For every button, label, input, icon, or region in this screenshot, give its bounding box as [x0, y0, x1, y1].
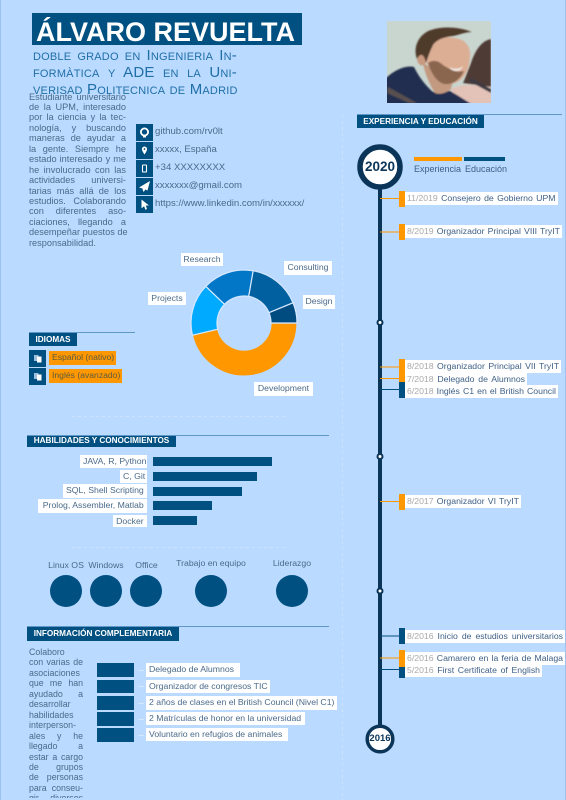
intro paragraph: ciaciones, llegando a	[29, 217, 126, 227]
intro paragraph: actividades universi-	[29, 175, 126, 185]
complementary paragraph: de grupos	[29, 762, 83, 772]
achievement label: Organizador de congresos TIC	[149, 681, 268, 691]
label: Development	[258, 383, 309, 393]
skill label	[120, 470, 147, 483]
bar	[153, 487, 242, 496]
heading: experiencia y educacion: EXPERIENCIA Y EDUCACIÓN	[363, 117, 478, 126]
complementary paragraph: interperson-	[29, 720, 76, 730]
legend	[414, 157, 507, 174]
achievement label: 2 Matrículas de honor en la universidad	[149, 713, 301, 723]
complementary paragraph: llegado a	[29, 741, 83, 751]
intro paragraph: desempeñar puestos de	[29, 227, 128, 237]
label	[181, 253, 223, 266]
skill label: leadership: Liderazgo	[273, 558, 311, 568]
complementary paragraph: de personas	[29, 772, 83, 782]
intro paragraph: maneras de ayudar a	[29, 133, 126, 143]
location text: xxxxx, España	[155, 144, 217, 155]
entry: 8/2018 Organizador Principal VII TryIT	[407, 361, 559, 371]
icon: language	[29, 350, 46, 367]
subtitle: doble grado en Ingenieria In-	[33, 47, 237, 64]
achievement label: Delegado de Alumnos	[149, 664, 234, 674]
circle	[130, 574, 162, 607]
bar	[153, 516, 197, 525]
entry: 5/2016 First Certificate of English	[407, 665, 540, 675]
heading: experiencia y educacion	[357, 115, 484, 128]
linkedin text: https://www.linkedin.com/in/xxxxxx/	[155, 198, 304, 209]
entry: 7/2018 Delegado de Alumnos	[407, 374, 525, 384]
skill label: C, Git	[123, 471, 145, 481]
circle	[90, 574, 122, 607]
heading: habilidades: HABILIDADES Y CONOCIMIENTOS	[34, 436, 169, 445]
bar	[153, 457, 272, 466]
complementary paragraph	[29, 647, 83, 798]
timeline axis	[378, 180, 382, 730]
achievement label: Voluntario en refugios de animales	[149, 729, 282, 739]
design segment	[269, 303, 297, 323]
label	[254, 382, 313, 396]
language label	[49, 369, 122, 383]
entry: 6/2018 Inglés C1 en el British Council	[407, 386, 556, 396]
skill label: windows: Windows	[88, 560, 124, 570]
skill label: linux: Linux OS	[48, 560, 84, 570]
subtitle: verisad Politecnica de Madrid	[33, 81, 238, 98]
entry: 8/2016 Inicio de estudios universitarios	[407, 631, 563, 641]
label	[148, 292, 186, 305]
intro paragraph: nología, y buscando	[29, 123, 126, 133]
icon: location pin	[136, 142, 153, 159]
research segment	[206, 270, 253, 304]
circle	[50, 574, 82, 607]
complementary paragraph: con varias de	[29, 657, 83, 667]
heading: habilidades	[27, 435, 176, 447]
contact list	[136, 124, 304, 213]
complementary paragraph: desarrollar	[29, 699, 71, 709]
complementary paragraph: ales y he	[29, 731, 83, 741]
legend: Educación	[465, 164, 507, 174]
intro paragraph: la gente. Siempre he	[29, 144, 126, 154]
consulting segment	[249, 271, 293, 313]
circle	[195, 574, 227, 607]
timeline	[357, 144, 403, 754]
skill label: teamwork: Trabajo en equipo	[176, 558, 246, 568]
bar	[153, 501, 212, 510]
skill label: SQL, Shell Scripting	[66, 485, 144, 495]
entry: 6/2016 Camarero en la feria de Malaga	[407, 653, 563, 663]
node markers	[378, 320, 382, 594]
entry: 11/2019 Consejero de Gobierno UPM	[407, 193, 556, 203]
intro paragraph: he involucrado con las	[29, 165, 126, 175]
title: ÁLVARO REVUELTA	[36, 17, 295, 47]
icon: phone	[136, 160, 153, 177]
heading: informacion complementaria: INFORMACIÓN COMPLEMENTARIA	[34, 629, 172, 638]
subtitle	[33, 47, 238, 98]
phone text: +34 XXXXXXXX	[155, 162, 225, 173]
achievement label	[146, 696, 337, 710]
skill label: Docker	[116, 516, 144, 526]
page edges	[0, 0, 1, 800]
skill label	[63, 484, 147, 498]
circle	[276, 574, 308, 607]
skill label: office: Office	[135, 560, 158, 570]
language label: Español (nativo)	[52, 352, 114, 362]
connectors	[380, 198, 400, 670]
entry: 8/2017 Organizador VI TryIT	[407, 496, 519, 506]
achievement label: 2 años de clases en el British Council (Nivel C1)	[149, 697, 334, 707]
language row: ingles	[29, 368, 122, 385]
complementary paragraph: asociaciones	[29, 668, 80, 678]
entry: 8/2019 Organizador Principal VIII TryIT	[407, 226, 560, 236]
achievement label	[146, 663, 240, 677]
intro paragraph: estado interesado y me	[29, 154, 126, 164]
bar chart	[153, 457, 272, 525]
github text: github.com/rv0lt	[155, 126, 223, 137]
achievement boxes	[97, 663, 134, 742]
intro paragraph: por la ciencia y la tec-	[29, 112, 126, 122]
label: Research	[183, 254, 221, 264]
intro paragraph: Estudiante universitario	[29, 92, 126, 102]
intro paragraph	[29, 92, 128, 248]
intro paragraph: con diferentes aso-	[29, 206, 126, 216]
icon: language	[29, 368, 46, 385]
icon: cursor	[136, 196, 153, 213]
intro paragraph: estudios. Colaborando	[29, 196, 126, 206]
email text: xxxxxxx@gmail.com	[155, 180, 242, 191]
timeline markers	[399, 191, 405, 207]
projects segment	[191, 286, 224, 335]
skill label	[38, 499, 147, 513]
skill label	[113, 515, 147, 527]
skill label: Prolog, Assembler, Matlab	[43, 500, 144, 510]
heading: idiomas: IDIOMAS	[35, 335, 71, 344]
language row: español	[29, 350, 116, 367]
label	[284, 261, 332, 275]
language label	[49, 351, 116, 365]
year 2020: 2020	[365, 159, 395, 174]
label: Consulting	[287, 262, 329, 272]
end year circle	[367, 726, 393, 752]
label: Design	[305, 296, 333, 306]
intro paragraph: de la UPM, interesado	[29, 102, 126, 112]
donut chart	[190, 270, 298, 376]
complementary paragraph: Colaboro	[29, 647, 65, 657]
complementary paragraph: que me han	[29, 678, 83, 688]
complementary paragraph: para conseu-	[29, 783, 83, 793]
heading: informacion complementaria	[27, 627, 179, 641]
subtitle: formàtica y ADE en la Uni-	[33, 64, 237, 81]
label	[303, 295, 335, 309]
label: Projects	[151, 293, 183, 303]
complementary paragraph: estar a cargo	[29, 752, 83, 762]
legend: Experiencia	[414, 164, 461, 174]
development segment	[192, 323, 297, 376]
icon: github	[136, 124, 153, 141]
icon: paper plane	[136, 178, 153, 195]
skill label: JAVA, R, Python	[83, 456, 146, 466]
heading: idiomas	[29, 333, 77, 346]
intro paragraph: responsabilidad.	[29, 238, 96, 248]
language label: Inglés (avanzado)	[52, 370, 120, 380]
start year circle	[360, 147, 400, 187]
intro paragraph: tarias más allá de los	[29, 186, 126, 196]
photo	[387, 21, 491, 103]
bar	[153, 472, 257, 480]
complementary paragraph: habilidades	[29, 710, 74, 720]
complementary paragraph: ayudado a	[29, 689, 83, 699]
year 2016: 2016	[369, 733, 391, 744]
